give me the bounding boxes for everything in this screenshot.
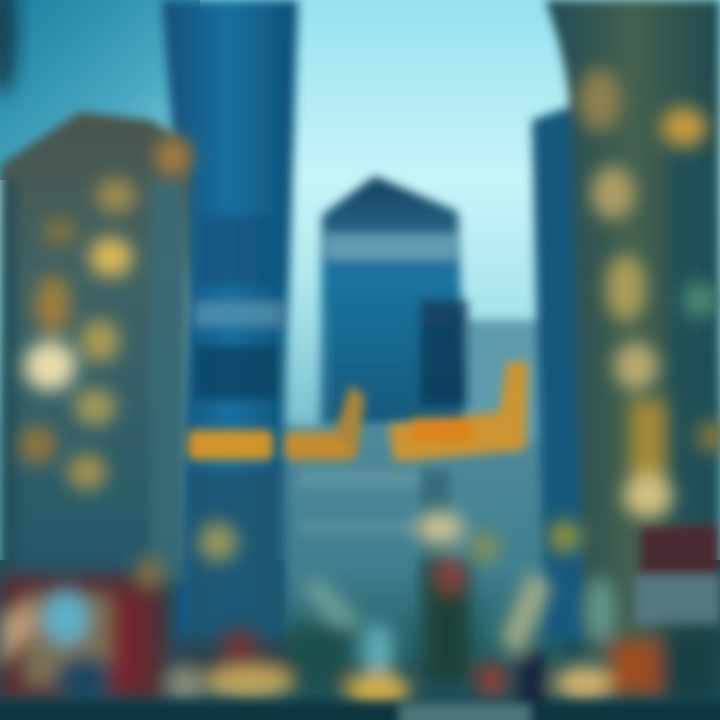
ground strip [0,702,720,720]
soft haze overlay [290,300,320,430]
building: right block [532,0,720,660]
street level: shops and signs [0,510,720,720]
building: lower centre block [280,320,560,665]
building: centre tower [320,176,468,425]
building: left block [0,112,192,590]
building: tall blue tower [162,0,298,690]
street base [0,560,720,720]
orange sign band [188,362,528,462]
lit windows: left block [19,137,191,491]
lit windows: right block [548,68,720,554]
